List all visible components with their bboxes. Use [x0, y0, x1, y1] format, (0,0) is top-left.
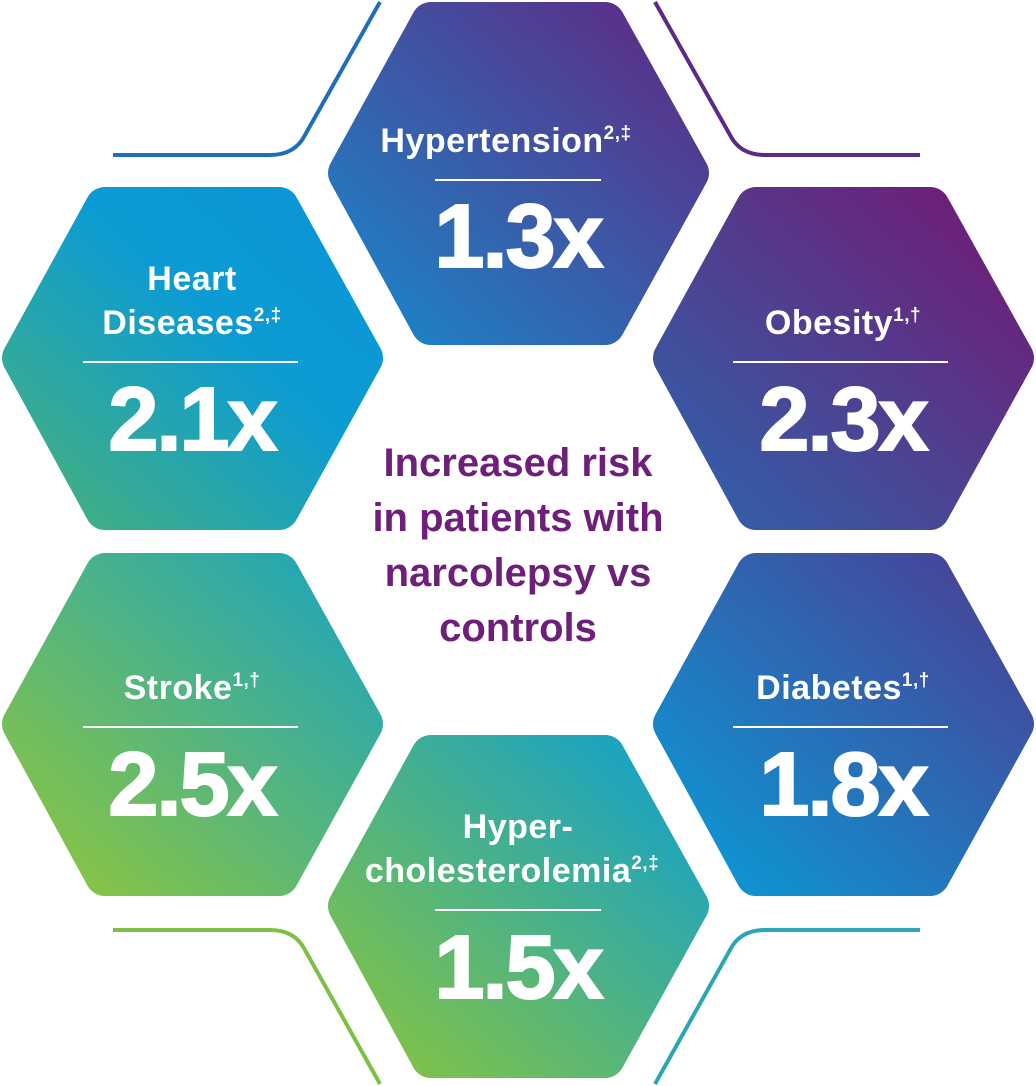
hex: obesity — [673, 207, 1014, 510]
hex: heart diseases: 2.1x — [108, 370, 278, 470]
hex: hypercholesterolemia: Hyper- — [463, 808, 573, 846]
hex: obesity: Obesity — [765, 304, 893, 342]
hex: heart diseases — [22, 207, 363, 510]
hex: heart diseases: 2,‡ — [254, 305, 282, 326]
center text: Increased risk — [383, 441, 653, 485]
hex: stroke: 1,† — [232, 670, 260, 691]
center text: narcolepsy vs — [385, 551, 651, 595]
hex: diabetes: 1.8x — [759, 735, 929, 835]
line: bottom-right connector — [655, 930, 920, 1084]
center text: controls — [439, 606, 597, 650]
hex: diabetes: 1,† — [902, 670, 930, 691]
hex: heart diseases: Diseases — [102, 304, 254, 342]
hex: hypertension: 1.3x — [434, 187, 604, 287]
center text — [372, 441, 664, 650]
hex: hypercholesterolemia: 2,‡ — [631, 853, 659, 874]
hex: diabetes — [673, 573, 1014, 876]
hex: diabetes: Diabetes — [756, 669, 902, 707]
line: bottom-left connector — [113, 930, 380, 1084]
center text: in patients with — [372, 496, 664, 540]
hex: hypercholesterolemia — [348, 755, 689, 1058]
hex: obesity: 2.3x — [759, 370, 929, 470]
hex: heart diseases: Heart — [147, 260, 237, 298]
hex: stroke: 2.5x — [108, 735, 278, 835]
line: top-left connector — [113, 2, 380, 155]
hex: hypertension: Hypertension — [380, 122, 604, 160]
hex: stroke — [22, 573, 363, 876]
line: top-right connector — [655, 2, 920, 155]
hex: stroke: Stroke — [124, 669, 232, 707]
hex: hypertension: 2,‡ — [604, 123, 632, 144]
hex: obesity: 1,† — [893, 305, 921, 326]
hex: hypercholesterolemia: cholesterolemia — [365, 852, 631, 890]
hex: hypertension — [348, 22, 689, 325]
hex: hypercholesterolemia: 1.5x — [434, 918, 604, 1018]
